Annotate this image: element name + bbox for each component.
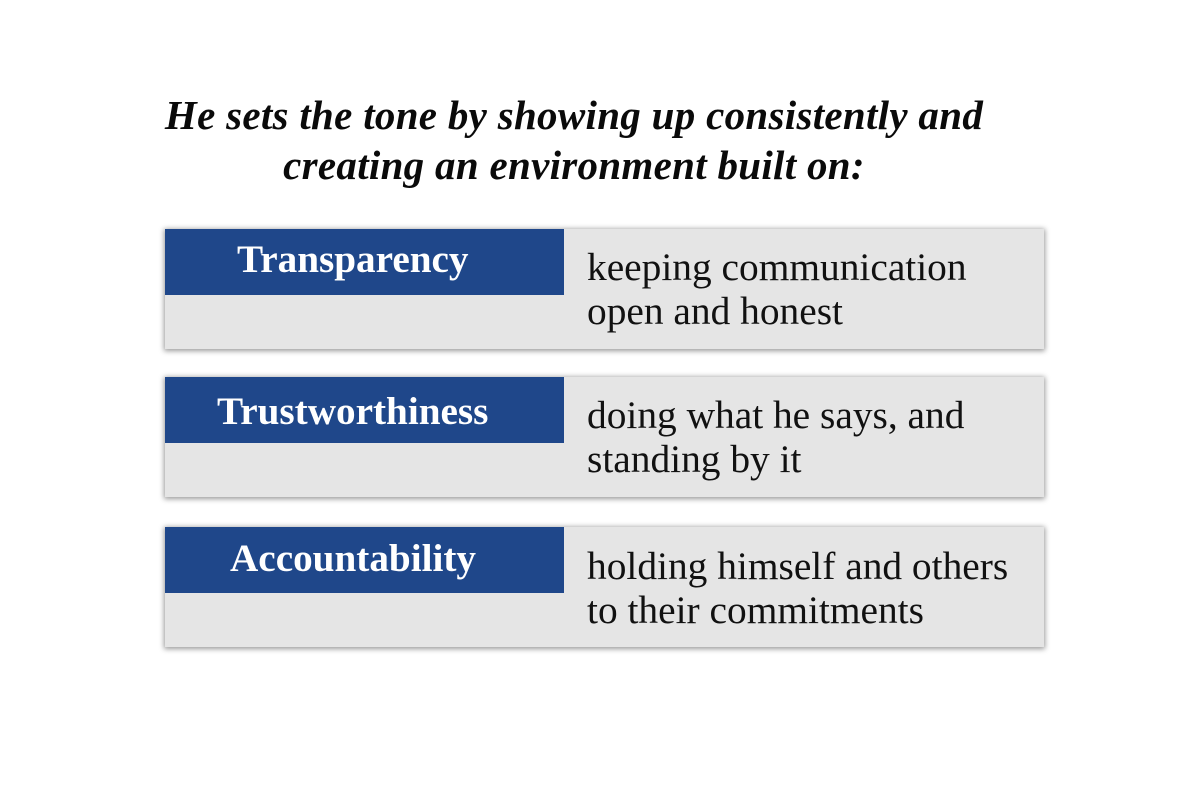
description: accountability: holding himself and others <box>587 544 1008 588</box>
description: transparency: keeping communication <box>587 245 967 289</box>
description: transparency: open and honest <box>587 289 843 333</box>
description: accountability: to their commitments <box>587 588 924 632</box>
description: trustworthiness: doing what he says, and <box>587 393 964 437</box>
description: trustworthiness <box>587 393 964 481</box>
title <box>164 92 984 188</box>
panel: transparency <box>165 229 1044 349</box>
title: He sets the tone by showing up consistently and <box>165 92 983 138</box>
panel: trustworthiness <box>165 377 1044 497</box>
description: transparency <box>587 245 967 333</box>
label bar: trustworthiness <box>165 377 564 443</box>
label: trustworthiness: Trustworthiness <box>217 390 488 433</box>
label: transparency: Transparency <box>237 238 469 281</box>
description: trustworthiness: standing by it <box>587 437 801 481</box>
description: accountability <box>587 544 1008 632</box>
panel: accountability <box>165 527 1044 647</box>
label bar: transparency <box>165 229 564 295</box>
label: accountability: Accountability <box>230 537 476 580</box>
label bar: accountability <box>165 527 564 593</box>
title: creating an environment built on: <box>283 142 865 188</box>
